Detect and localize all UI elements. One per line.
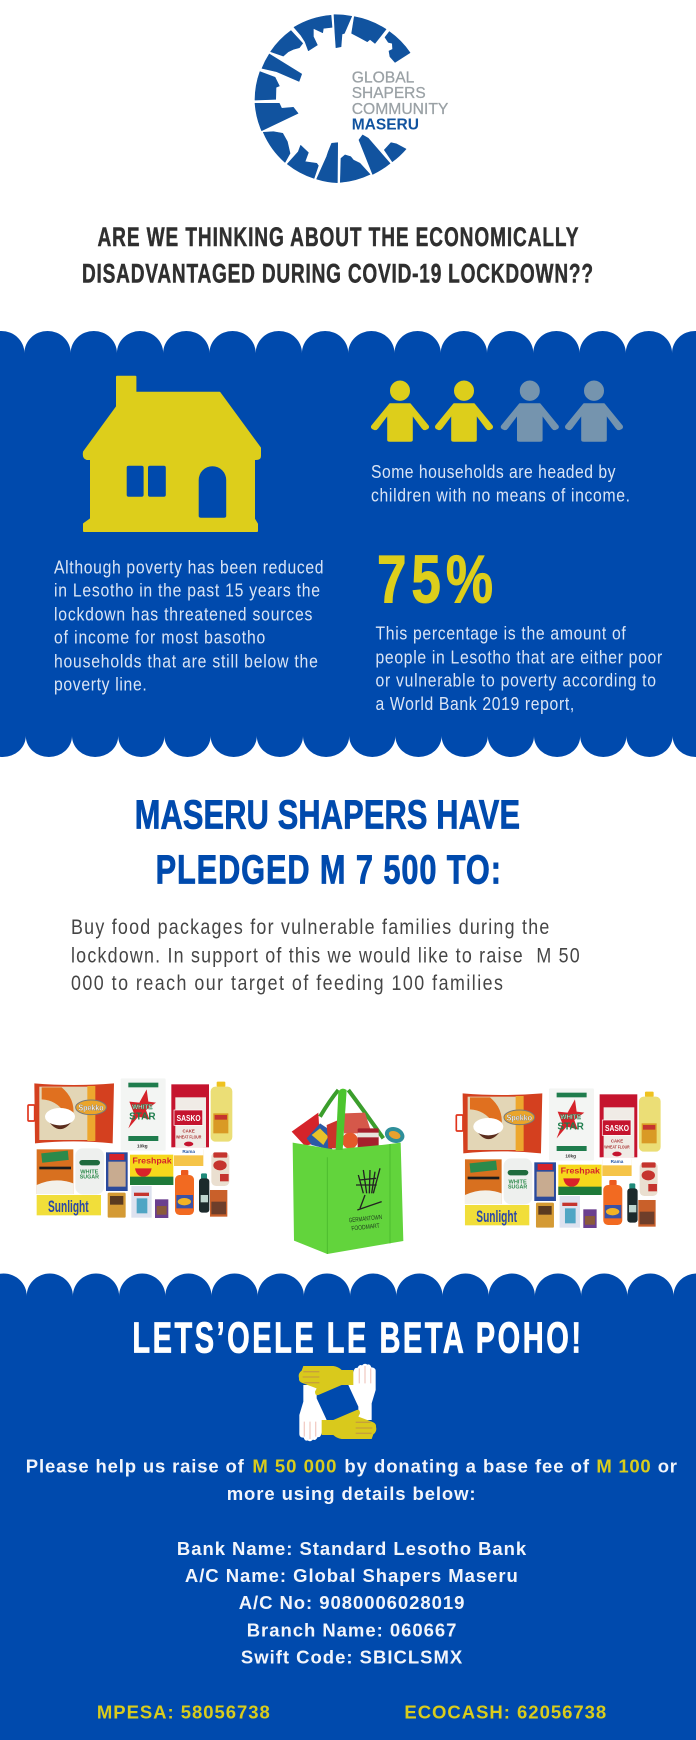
image: groceries right: 10kg <box>565 1153 576 1158</box>
text: child-headed households <box>371 461 630 506</box>
text: MPESA number: MPESA: 58056738 <box>97 1701 270 1722</box>
text: bank details: A/C Name: Global Shapers Maseru <box>185 1565 518 1586</box>
text: poverty reduction: of income for most basotho <box>54 626 265 648</box>
image: green grocery bag: FOODMART <box>351 1223 380 1232</box>
text: child-headed households: children with no means of income. <box>371 484 630 506</box>
text: donation request <box>26 1456 677 1504</box>
logo wordmark: COMMUNITY <box>352 101 449 118</box>
image: groceries right: Freshpak <box>561 1165 600 1175</box>
text: bank details <box>177 1538 527 1667</box>
text: World Bank statistic: people in Lesotho that are either poor <box>376 646 662 668</box>
image: groceries right: Sunlight <box>476 1207 517 1226</box>
image: groceries left: Freshpak <box>132 1155 172 1165</box>
title: DISADVANTAGED DURING COVID-19 LOCKDOWN?? <box>82 259 593 288</box>
text: World Bank statistic <box>376 622 662 714</box>
heading: pledge: PLEDGED M 7 500 TO: <box>156 846 501 892</box>
image: groceries left: SASKO <box>177 1113 201 1123</box>
text: donation request: or <box>658 1456 677 1477</box>
logo: Global Shapers Community Maseru <box>255 15 449 183</box>
logo ring of skyline segments <box>255 15 410 183</box>
text: World Bank statistic: or vulnerable to poverty according to <box>376 669 656 691</box>
text: donation request: M 100 <box>596 1456 651 1477</box>
statistic: 75%: 75% <box>377 541 493 617</box>
image: groceries left: Rama <box>182 1149 195 1154</box>
text: poverty reduction: households that are still below the <box>54 650 318 672</box>
image: groceries right: WHITE <box>560 1114 581 1121</box>
image: groceries left: Spekko <box>78 1102 104 1112</box>
logo wordmark: GLOBAL <box>352 69 414 86</box>
image: groceries left: SUGAR <box>80 1175 99 1181</box>
text: donation request: M 50 000 <box>252 1456 336 1477</box>
text: poverty reduction <box>54 556 324 695</box>
image: groceries right <box>456 1088 661 1228</box>
panel: poverty facts <box>0 331 696 757</box>
heading: pledge <box>135 791 520 892</box>
image: groceries left: STAR <box>129 1112 156 1123</box>
image: groceries left: WHITE <box>80 1169 99 1175</box>
logo wordmark <box>352 69 449 133</box>
icon: house <box>84 377 260 531</box>
text: bank details: Branch Name: 060667 <box>247 1619 456 1640</box>
text: poverty reduction: in Lesotho in the past 15 years the <box>54 579 320 601</box>
image: groceries right: WHEAT FLOUR <box>604 1145 630 1150</box>
text: donation request: Please help us raise of <box>26 1456 245 1477</box>
text: food packages description: lockdown. In support of this we would like to raise M 50 <box>71 944 580 968</box>
title <box>82 222 593 288</box>
image: groceries right: WHITE <box>509 1179 527 1185</box>
text: World Bank statistic: This percentage is the amount of <box>376 622 626 644</box>
text: food packages description: Buy food packages for vulnerable families during the <box>71 916 549 939</box>
title: ARE WE THINKING ABOUT THE ECONOMICALLY <box>98 222 579 252</box>
text: poverty reduction: lockdown has threatened sources <box>54 603 312 625</box>
text: poverty reduction: Although poverty has been reduced <box>54 556 324 578</box>
panel: donation details <box>0 1274 696 1740</box>
image: green grocery bag: GERMANTOWN <box>349 1214 383 1224</box>
image: groceries left: 10kg <box>137 1143 148 1148</box>
image: groceries left: WHEAT FLOUR <box>176 1135 202 1140</box>
image: groceries right: SUGAR <box>508 1185 527 1191</box>
image: green grocery bag <box>292 1089 407 1254</box>
text: food packages description <box>71 916 580 995</box>
image: groceries right: STAR <box>557 1122 584 1133</box>
image: groceries left: CAKE <box>183 1129 195 1134</box>
image: groceries left: WHITE <box>132 1104 153 1111</box>
image: groceries right: Spekko <box>507 1112 532 1122</box>
heading: pledge: MASERU SHAPERS HAVE <box>135 791 520 837</box>
logo wordmark: SHAPERS <box>352 85 426 102</box>
text: food packages description: 000 to reach our target of feeding 100 families <box>71 972 503 995</box>
icon: joined hands <box>299 1364 376 1441</box>
image: groceries left: Sunlight <box>48 1197 89 1216</box>
text: donation request: by donating a base fee of <box>344 1456 590 1477</box>
icon: four children, two highlighted <box>372 381 622 441</box>
heading: Lets'oele le beta poho: LETS’OELE LE BETA POHO! <box>132 1313 581 1362</box>
text: bank details: A/C No: 9080006028019 <box>239 1592 464 1613</box>
image: groceries right: SASKO <box>605 1123 629 1133</box>
text: bank details: Swift Code: SBICLSMX <box>241 1646 463 1667</box>
image: groceries right: CAKE <box>611 1139 623 1144</box>
text: bank details: Bank Name: Standard Lesotho Bank <box>177 1538 527 1559</box>
image: groceries left <box>28 1078 232 1218</box>
text: child-headed households: Some households are headed by <box>371 461 616 482</box>
image: groceries right: Rama <box>611 1159 624 1164</box>
scalloped blue background <box>0 1274 696 1740</box>
text: donation request: more using details below: <box>227 1483 476 1504</box>
text: World Bank statistic: a World Bank 2019 report, <box>376 693 574 714</box>
text: poverty reduction: poverty line. <box>54 673 147 695</box>
text: EcoCash number: ECOCASH: 62056738 <box>404 1701 606 1722</box>
scalloped blue background <box>0 331 696 757</box>
logo wordmark: MASERU <box>352 116 419 133</box>
